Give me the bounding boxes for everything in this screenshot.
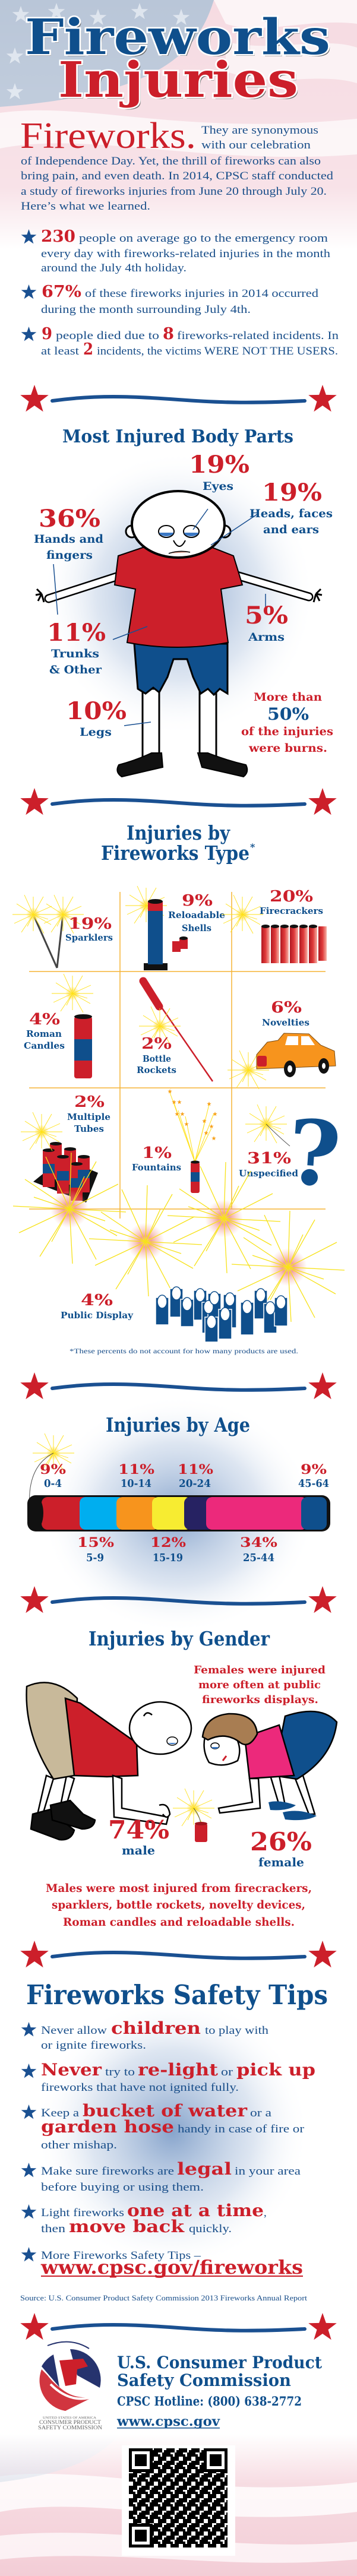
tip 2: re-light (138, 2060, 218, 2080)
callout: burns: of the injuries (241, 725, 333, 738)
logo: CPSC seal: UNITED STATES OF AMERICA (43, 2417, 96, 2420)
cell: unspecified: Unspecified (239, 1168, 299, 1179)
cell: unspecified: ? (285, 1100, 344, 1208)
background: flag bottom (0, 2435, 357, 2576)
tip 4: legal (177, 2159, 232, 2179)
tip 6: link: More Fireworks Safety Tips – (41, 2249, 201, 2262)
cell: reloadable shells: 9% (182, 892, 213, 910)
stat bullet: deaths: incidents, the victims WERE NOT THE USERS. (97, 345, 338, 357)
callout: burns: 50% (267, 704, 309, 724)
section: injuries by age: 34% (240, 1535, 277, 1550)
cell: novelties car (228, 999, 336, 1089)
labels: body part percentages: and ears (263, 523, 319, 536)
section: injuries by age: 5-9 (86, 1552, 104, 1564)
bar chart: age (27, 1495, 330, 1531)
cell: bottle rockets: Rockets (137, 1065, 176, 1075)
section: injuries by age: 20-24 (179, 1477, 211, 1490)
section: injuries by age: 0-4 (44, 1477, 62, 1490)
shirt (115, 544, 242, 647)
cell: sparklers: Sparklers (65, 932, 113, 943)
section: injuries by age (27, 1395, 330, 1633)
cell: firecrackers: Firecrackers (260, 906, 323, 916)
title: Fireworks (25, 9, 330, 66)
callout: males: sparklers, bottle rockets, novelty devices, (52, 1898, 305, 1912)
icon: firecracker with spark (173, 1789, 214, 1842)
CPSC contact block: www.cpsc.gov (116, 2414, 220, 2429)
tip 5: one at a time (127, 2201, 264, 2220)
CPSC contact block: U.S. Consumer Product (117, 2353, 322, 2372)
section: injuries by age: 9% (40, 1462, 66, 1477)
tip 1: or ignite fireworks. (41, 2039, 146, 2052)
callout: burns: were burns. (248, 742, 327, 755)
gender percentages: male (122, 1843, 155, 1857)
CPSC contact block: Safety Commission (117, 2371, 291, 2390)
footnote: *These percents do not account for how many products are used. (69, 1347, 298, 1355)
tip 2: try to (105, 2066, 135, 2078)
section: injuries by age: 25-44 (243, 1552, 274, 1564)
labels: body part percentages: Hands and (34, 533, 103, 546)
cell: firecrackers: 20% (270, 888, 313, 906)
stat bullet: deaths: at least (41, 345, 80, 357)
tip 1: to play with (205, 2024, 269, 2037)
stat bullet: deaths: 8 (163, 325, 174, 343)
cell: unspecified (239, 1100, 344, 1208)
section: injuries by age: 15% (77, 1535, 114, 1550)
tip 6: link (21, 2247, 303, 2278)
QR code (122, 2445, 235, 2556)
source: Source: U.S. Consumer Product Safety Commission 2013 Fireworks Annual Report (20, 2293, 307, 2302)
labels: body part percentages: & Other (49, 663, 102, 676)
gender percentages: female (258, 1855, 304, 1869)
tip 5: , (264, 2207, 267, 2219)
labels: body part percentages: 36% (39, 505, 100, 533)
tip 5: quickly. (189, 2223, 232, 2235)
labels: body part percentages: Heads, faces (249, 507, 333, 520)
cell: firecrackers (222, 888, 327, 963)
callout: burns (241, 691, 333, 755)
figure: injured boy (36, 451, 322, 777)
tip 5: move back (69, 2217, 185, 2236)
title: Fireworks (27, 11, 332, 68)
labels: body part percentages: 11% (47, 619, 106, 647)
cell: reloadable shells: Shells (182, 923, 211, 933)
figure: male (27, 1682, 191, 1840)
labels: body part percentages: 19% (262, 479, 322, 507)
intro text: Here’s what we learned. (21, 200, 150, 213)
section: safety tips: Fireworks Safety Tips (26, 1979, 328, 2011)
stat bullet: deaths (21, 325, 339, 359)
tip 4: Make sure fireworks are (41, 2165, 174, 2178)
cell: bottle rockets: 2% (141, 1035, 172, 1053)
cell: public display (61, 1287, 288, 1342)
stat bullet: 230 (21, 227, 331, 274)
figure: female (203, 1711, 337, 1820)
heading: Injuries by Fireworks Type: Injuries by (127, 821, 230, 844)
callout: females: fireworks displays. (202, 1694, 318, 1706)
CPSC contact block: CPSC Hotline: (800) 638-2772 (117, 2394, 302, 2409)
callout: females: Females were injured (194, 1664, 326, 1676)
gender percentages: 74% (108, 1815, 169, 1844)
intro text: a study of fireworks injuries from June 20 through July 20. (21, 185, 327, 198)
head (126, 526, 138, 537)
heading: Most Injured Body Parts: Most Injured Body Parts (62, 426, 293, 447)
heading: Injuries by Fireworks Type: Fireworks Type (101, 841, 249, 865)
labels: body part percentages: Legs (80, 726, 112, 739)
cell: sparklers: 19% (68, 915, 112, 933)
cell: public display: Public Display (61, 1310, 134, 1321)
section: injuries by age: Injuries by Age (106, 1413, 250, 1436)
stat bullet: 67% (21, 283, 319, 316)
stat bullet: deaths: fireworks-related incidents. In (177, 330, 339, 342)
labels: body part percentages: 5% (245, 602, 288, 629)
tip 1 (21, 2018, 269, 2052)
tip 3: or a (250, 2107, 272, 2119)
stat bullet: 230: around the July 4th holiday. (41, 262, 187, 274)
tip 4 (21, 2159, 301, 2194)
bursts (13, 1153, 345, 1322)
stat bullet: deaths: 9 (42, 325, 52, 343)
labels: body part percentages: 19% (189, 451, 249, 479)
background: flag top (0, 0, 357, 249)
tip 2: pick up (236, 2060, 315, 2080)
section: injuries by age: 45-64 (298, 1477, 329, 1490)
logo: CPSC seal (38, 2342, 103, 2431)
cell: bottle rockets: Bottle (143, 1053, 171, 1064)
shoes (117, 753, 163, 777)
stat bullet: 67%: of these fireworks injuries in 2014 occurred (85, 287, 319, 300)
cell: bottle rockets (137, 981, 213, 1081)
cell: multiple tubes: Multiple (67, 1112, 110, 1122)
heading: Injuries by Gender: Injuries by Gender (89, 1627, 270, 1650)
arms (49, 573, 309, 599)
tip 2: Never (41, 2060, 102, 2080)
labels: body part percentages (34, 451, 333, 739)
cell: fountains: 1% (142, 1144, 172, 1162)
logo: CPSC seal: SAFETY COMMISSION (38, 2425, 103, 2431)
callout: males (46, 1882, 312, 1929)
callout: females: more often at public (198, 1679, 321, 1691)
callout: females (194, 1664, 326, 1706)
cell: novelties car: 6% (271, 999, 302, 1017)
heading: Injuries by Fireworks Type: * (250, 841, 255, 853)
tip 5: then (41, 2223, 66, 2235)
tip 4: in your area (235, 2165, 301, 2178)
section: injuries by age: 11% (118, 1462, 154, 1477)
cell: roman candles: Roman (26, 1028, 62, 1039)
intro text: bring pain, and even death. In 2014, CPSC staff conducted (21, 170, 334, 182)
logo: CPSC seal: CONSUMER PRODUCT (39, 2419, 102, 2425)
stat bullet: 230: people on average go to the emergency room (79, 232, 328, 245)
cell: roman candles: Candles (24, 1040, 65, 1051)
heading: Injuries by Fireworks Type (101, 821, 255, 865)
gender percentages: 26% (250, 1827, 312, 1856)
cell: fountains (132, 1088, 217, 1193)
gender percentages (108, 1815, 312, 1869)
cell: sparklers (12, 895, 113, 968)
cell: novelties car: Novelties (262, 1017, 309, 1028)
stat bullet: 230: 230 (41, 227, 75, 246)
tip 3: other mishap. (41, 2139, 117, 2151)
callout: males: Males were most injured from firecrackers, (46, 1882, 312, 1895)
tip 6: link: www.cpsc.gov/fireworks (40, 2256, 303, 2278)
tip 2: fireworks that have not ignited fully. (41, 2081, 239, 2094)
cell: roman candles (24, 974, 93, 1078)
tip 5 (21, 2201, 267, 2236)
cell: public display: 4% (81, 1292, 113, 1309)
tip 1: Never allow (41, 2024, 107, 2037)
tip 4: before buying or using them. (41, 2181, 204, 2194)
title: Injuries (58, 52, 298, 109)
cell: unspecified: 31% (247, 1150, 291, 1167)
cell: multiple tubes: 2% (74, 1093, 105, 1111)
intro text (20, 116, 334, 213)
callout: burns: More than (254, 691, 322, 704)
intro text: of Independence Day. Yet, the thrill of fireworks can also (21, 155, 321, 167)
legs (143, 689, 159, 757)
section: injuries by age: 12% (150, 1535, 186, 1550)
tip 1: children (111, 2018, 201, 2038)
stat bullet: deaths: 2 (83, 340, 93, 359)
tip 2 (21, 2060, 315, 2094)
tip 5: Light fireworks (41, 2207, 124, 2219)
stat bullet: 230: every day with fireworks-related injuries in the month (41, 248, 331, 260)
labels: body part percentages: 10% (66, 697, 127, 725)
CPSC contact block (116, 2353, 322, 2429)
shorts (134, 644, 228, 695)
tip 3 (21, 2101, 305, 2151)
stat bullet: 67%: during the month surrounding July 4th. (41, 303, 251, 316)
section: injuries by age: 11% (178, 1462, 213, 1477)
labels: body part percentages: fingers (46, 549, 93, 562)
labels: body part percentages: Trunks (51, 647, 99, 660)
tip 3: garden hose (41, 2117, 174, 2137)
section: safety tips (21, 1979, 328, 2278)
tip 2: or (221, 2066, 233, 2078)
section: injuries by age: 10-14 (121, 1477, 151, 1490)
labels: body part percentages: Arms (248, 631, 285, 644)
cell: multiple tubes (21, 1093, 110, 1202)
stat bullet: deaths: people died due to (56, 330, 159, 342)
fireworks type grid (12, 886, 345, 1342)
labels: body part percentages: Eyes (203, 480, 233, 493)
intro text: They are synonymous (201, 124, 318, 137)
cell: roman candles: 4% (29, 1011, 60, 1028)
cell: fountains: Fountains (132, 1162, 181, 1173)
stat bullet: 67%: 67% (42, 283, 81, 301)
section: injuries by age: 15-19 (153, 1552, 183, 1564)
cell: reloadable shells: Reloadable (168, 910, 225, 920)
intro text: Fireworks. (20, 116, 196, 156)
intro text: with our celebration (201, 139, 311, 151)
tip 3: bucket of water (83, 2101, 248, 2121)
tip 3: Keep a (41, 2107, 80, 2119)
section: injuries by age: 9% (301, 1462, 327, 1477)
cell: reloadable shells (125, 886, 225, 970)
title: Injuries (60, 53, 300, 110)
tip 3: handy in case of fire or (178, 2123, 305, 2135)
cell: multiple tubes: Tubes (74, 1124, 104, 1134)
callout: males: Roman candles and reloadable shells. (63, 1916, 295, 1929)
title (25, 9, 332, 110)
